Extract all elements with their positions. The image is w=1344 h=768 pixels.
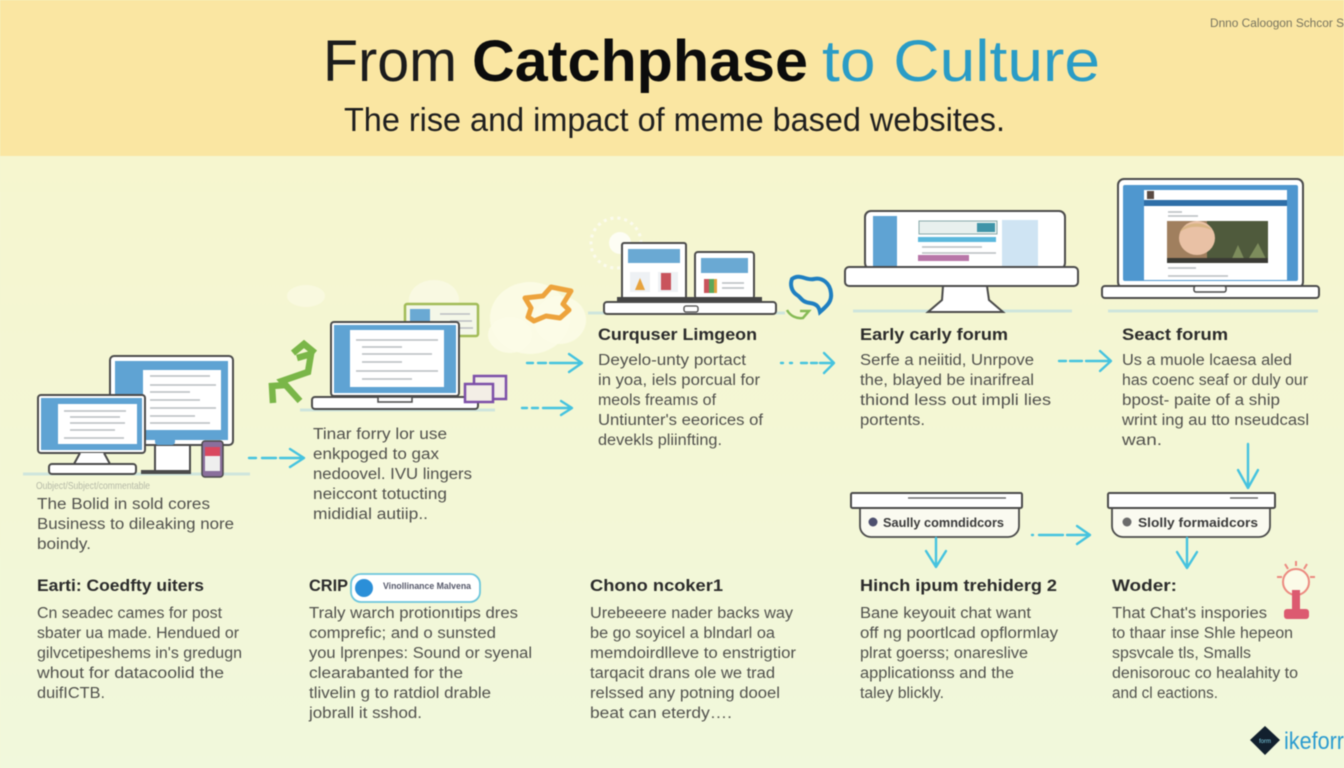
title: to Culture <box>822 29 1100 94</box>
icon: light bulb <box>1277 561 1315 619</box>
column 3 heading: Chono ncoker1 <box>590 576 723 595</box>
step 3 text: Deyelo-unty portact <box>598 352 747 369</box>
column 1 text: duifICTB. <box>37 685 105 702</box>
step 4 text: Serfe a neiitid, Unrpove <box>860 352 1034 369</box>
front monitor <box>38 395 145 474</box>
column 4 text <box>860 605 1058 702</box>
column 3 text <box>590 605 796 722</box>
step 3 text <box>598 352 764 449</box>
step 3 text: in yoa, iels porcual for <box>598 372 760 389</box>
column 2 text: you lprenpes: Sound or syenal <box>309 645 532 662</box>
title: Catchphase <box>472 29 808 94</box>
top right note: Dnno Caloogon Schcor S <box>1210 18 1344 30</box>
header band <box>0 0 1344 156</box>
column 1 heading: Earti: Coedfty uiters <box>37 576 204 595</box>
arrow 2 to 3 lower <box>522 401 572 415</box>
column 5 text <box>1112 605 1298 702</box>
step 1 text: boindy. <box>37 536 91 553</box>
step 2 text: enkpoged to gax <box>313 446 439 463</box>
step 2 illustration: laptop <box>272 304 506 410</box>
step 5 illustration: laptop with photo <box>1102 179 1319 311</box>
column 4 text: applicationss and the <box>860 665 1014 682</box>
column 2 text: comprefic; and o sunsted <box>309 625 496 642</box>
column 4 text: taley blickly. <box>860 685 944 702</box>
label box: Saully comndidcors: Saully comndidcors <box>883 515 1004 530</box>
column 3 text: relssed any potning dooel <box>590 685 780 702</box>
column 4 text: Bane keyouit chat want <box>860 605 1032 622</box>
column 5 heading: Woder: <box>1112 576 1177 595</box>
column 1 text: whout for datacoolid the <box>36 665 224 682</box>
step 3 text: meols freamıs of <box>598 392 717 409</box>
column 2 text <box>308 605 532 722</box>
step 5 heading: Seact forum <box>1122 325 1228 344</box>
column 3 text: tarqacit drans ole we trad <box>590 665 775 682</box>
logo <box>1250 726 1344 755</box>
step 3 heading: Curquser Limgeon <box>598 325 757 344</box>
icon: blue speech shape <box>791 277 831 312</box>
step 2 text: neiccont totucting <box>313 486 447 503</box>
column 5 text: denisorouc co healahity to <box>1112 665 1298 682</box>
column 2 text: clearabanted for the <box>309 665 463 682</box>
step 1 caption: Oubject/Subject/commentable <box>36 480 150 492</box>
icon: sun <box>591 218 641 268</box>
icon: orange shape <box>525 287 571 321</box>
column 1 text: Cn seadec cames for post <box>37 605 223 622</box>
icon: purple windows <box>465 376 506 402</box>
column 3 text: Urebeeere nader backs way <box>590 605 793 622</box>
step 4 text: portents. <box>860 412 925 429</box>
title <box>323 29 1100 94</box>
arrow 1 to 2 <box>249 449 304 467</box>
decorative clouds <box>287 280 586 354</box>
step 3 text: devekls pliinfting. <box>598 432 722 449</box>
column 1 text: gilvcetipeshems in's gredugn <box>37 645 242 662</box>
step 5 text: has coenc seaf or duly our <box>1122 372 1308 389</box>
photo <box>1167 221 1268 263</box>
step 2 text: mididial autiip.. <box>313 506 428 523</box>
logo: form <box>1259 739 1271 745</box>
step 4 text: thiond less out impli lies <box>860 392 1051 409</box>
step 3 illustration: tablet and device on dock <box>588 218 785 314</box>
column 2 heading: CRIP <box>309 576 348 595</box>
icon: green arrows <box>272 344 315 403</box>
column 3 text: memdoirdlleve to enstrigtior <box>590 645 796 662</box>
step 5 text: bpost- paite of a ship <box>1122 392 1280 409</box>
column 4 heading: Hinch ipum trehiderg 2 <box>860 576 1057 595</box>
arrow 3 to 4 <box>781 353 834 373</box>
arrow down to right box <box>1238 444 1258 488</box>
step 4 illustration: early forum monitor <box>845 211 1078 312</box>
column 3 text: beat can eterdy…. <box>590 705 732 722</box>
column 5 text: spsvcale tls, Smalls <box>1112 645 1251 662</box>
subtitle: The rise and impact of meme based websites. <box>344 101 1005 138</box>
icon: small green arrow <box>787 310 809 318</box>
column 1 text: sbater ua made. Hendued or <box>37 625 239 642</box>
column 1 text <box>36 605 242 702</box>
pill badge: Vinollinance Malvena <box>383 581 472 592</box>
column 5 text: to thaar inse Shle hepeon <box>1112 625 1293 642</box>
step 2 text: nedoovel. IVU lingers <box>313 466 472 483</box>
step 5 text: wan. <box>1121 432 1162 449</box>
step 4 heading: Early carly forum <box>860 325 1008 344</box>
column 4 text: off ng poortlcad opflormlay <box>860 625 1058 642</box>
step 4 text: the, blayed be inarifreal <box>860 372 1034 389</box>
label box: Slolly formaidcors: Slolly formaidcors <box>1138 515 1258 530</box>
column 5 text: That Chat's inspories <box>1112 605 1267 622</box>
phone <box>202 441 223 477</box>
step 5 text: Us a muole lcaesa aled <box>1122 352 1292 369</box>
step 5 text: wrint ing au tto nseudcasl <box>1121 412 1309 429</box>
step 1 illustration: desktop and phone <box>23 356 250 477</box>
step 2 text: Tinar forry lor use <box>313 426 447 443</box>
step 4 text <box>860 352 1051 429</box>
step 1 text <box>37 496 234 553</box>
column 4 text: plrat goerss; onareslive <box>860 645 1028 662</box>
column 2 text: Traly warch protionıtips dres <box>309 605 518 622</box>
arrow between boxes <box>1032 526 1090 544</box>
step 1 text: Business to dileaking nore <box>37 516 234 533</box>
pill badge <box>351 574 480 602</box>
back monitor <box>110 356 233 474</box>
arrow down from right box <box>1177 538 1197 568</box>
arrow 4 to 5 <box>1059 351 1111 371</box>
title: From <box>323 29 457 94</box>
step 1 text: The Bolid in sold cores <box>37 496 210 513</box>
label box: Slolly formaidcors <box>1108 493 1275 537</box>
label box: Saully comndidcors <box>851 493 1022 537</box>
column 2 text: tlivelin g to ratdiol drable <box>309 685 491 702</box>
laptop <box>312 322 478 409</box>
arrow 2 to 3 upper <box>527 354 582 372</box>
green back monitor <box>405 304 478 336</box>
step 5 text <box>1121 352 1309 449</box>
column 5 text: and cl eactions. <box>1112 685 1218 702</box>
column 3 text: be go soyicel a blndarl oa <box>590 625 775 642</box>
step 2 text <box>313 426 472 523</box>
arrow down from left box <box>926 538 946 567</box>
column 2 text: jobrall it sshod. <box>308 705 422 722</box>
step 3 text: Untiunter's eeorices of <box>598 412 764 429</box>
